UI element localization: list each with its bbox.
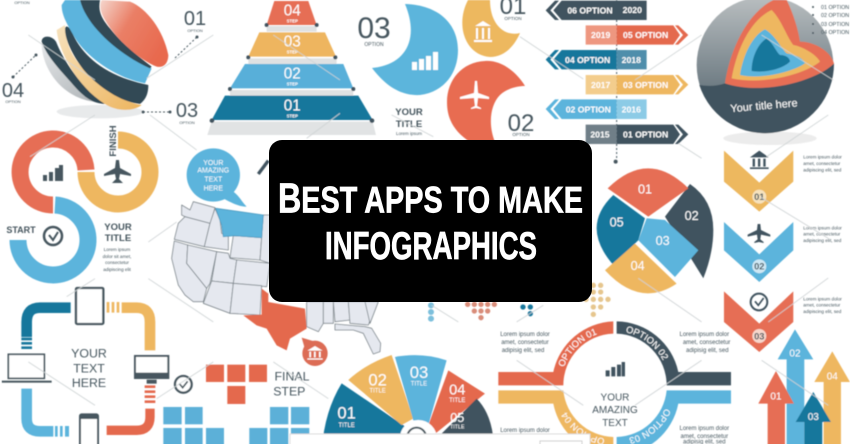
device cycle: HERE	[72, 376, 106, 390]
square blocks: FINAL	[274, 370, 310, 384]
speech balloon: HERE	[204, 185, 223, 192]
fan chart	[322, 355, 494, 444]
chevron 02: adipiscing elit, sed	[803, 238, 842, 243]
coral top	[100, 0, 168, 67]
option labels around hemisphere: OPTION	[187, 28, 203, 33]
option ring diagram: YOUR	[601, 392, 629, 403]
option ring diagram: adipisig elit, sed	[502, 348, 544, 354]
bottom popup strip	[290, 434, 590, 444]
connector lines	[28, 35, 833, 405]
chevron 02	[724, 222, 842, 282]
fan chart: TITLE	[449, 398, 465, 404]
option ring diagram: amet, consectetur	[681, 434, 728, 440]
option labels around hemisphere: 03	[176, 100, 198, 122]
pie chart	[597, 168, 713, 293]
fan chart: 05	[450, 411, 464, 425]
timeline option arrows: 06 OPTION	[567, 6, 613, 16]
device cycle: YOUR	[71, 346, 107, 360]
moon: blue 03: YOUR	[395, 107, 423, 118]
row 03	[586, 75, 617, 94]
US map south east	[307, 302, 381, 354]
title panel	[269, 140, 592, 302]
moon: blue 03: TITLE	[396, 119, 422, 130]
chevron 01: Lorem ipsum dolor	[803, 155, 842, 160]
infinity loop: TITLE	[105, 233, 131, 244]
infinity loop: consectetur	[105, 260, 129, 265]
step pyramid: 02	[284, 66, 301, 83]
chevron 03: 03	[754, 331, 764, 341]
option ring diagram: Lorem ipsum dolor	[680, 426, 729, 432]
infinity loop	[6, 125, 150, 275]
step pyramid: 04	[284, 3, 301, 20]
chevron 01: adipiscing elit, sed	[803, 167, 842, 172]
timeline option arrows: 05 OPTION	[623, 30, 668, 40]
step pyramid: 03	[284, 34, 301, 51]
pie chart: 02	[685, 209, 699, 223]
fan chart: 01	[337, 404, 356, 423]
chevron 01: amet, consectetur	[803, 161, 841, 166]
moon: blue 03: 03	[357, 12, 391, 45]
sphere legend: 02 OPTION	[821, 13, 849, 19]
option labels around hemisphere: OPTION	[5, 99, 21, 104]
phone	[80, 414, 98, 444]
bowl	[42, 43, 107, 103]
timeline option arrows: 01 OPTION	[623, 129, 668, 139]
speech balloon: TEXT	[204, 177, 223, 184]
square blocks	[163, 365, 310, 444]
step pyramid: STEP	[287, 49, 298, 54]
fan chart: TITLE	[411, 381, 427, 387]
timeline option arrows: 2016	[622, 105, 641, 115]
pie chart: 05	[610, 216, 624, 230]
pie chart: 03	[656, 234, 670, 248]
tablet	[76, 288, 103, 324]
hemisphere stack	[42, 0, 168, 118]
growth arrows: 02	[789, 349, 801, 360]
upper dark band	[80, 0, 152, 68]
option labels around hemisphere	[2, 0, 206, 125]
timeline option arrows: 2017	[591, 80, 610, 90]
chevron 01	[724, 151, 842, 212]
timeline option arrows: 2015	[590, 129, 610, 139]
option labels around hemisphere: 01	[184, 8, 206, 30]
chevron 01: 01	[754, 192, 764, 202]
Texas	[243, 289, 307, 350]
blue band	[62, 0, 152, 83]
infinity loop: adipiscing elit	[103, 267, 132, 272]
speech balloon	[187, 148, 268, 207]
option ring diagram: Lorem ipsum dolor	[500, 332, 550, 338]
heart sphere: Your title here	[730, 97, 798, 115]
sphere legend: 04 OPTION	[821, 30, 849, 36]
square blocks: STEP	[273, 385, 305, 399]
option ring diagram: TEXT	[602, 418, 628, 429]
growth arrows	[758, 329, 850, 444]
timeline option arrows: 02 OPTION	[566, 105, 611, 115]
option ring diagram: Lorem ipsum dolor	[680, 332, 729, 338]
option labels around hemisphere: OPTION	[179, 120, 195, 125]
chevron 02: amet, consectetur	[803, 232, 841, 237]
heart sphere	[697, 0, 834, 145]
device cycle: TEXT	[73, 361, 105, 375]
Montana	[216, 208, 263, 238]
moon: blue 03	[357, 4, 458, 136]
title line 1: BEST APPS TO MAKE	[278, 174, 583, 222]
timeline option arrows: 04 OPTION	[565, 55, 610, 65]
infinity loop: Lorem ipsum	[104, 247, 130, 252]
chevron 03: amet, consectetur	[803, 303, 841, 308]
step pyramid: STEP	[287, 18, 298, 23]
timeline option arrows: 2018	[622, 55, 641, 65]
step pyramid: 01	[284, 98, 301, 115]
lower dark band	[42, 37, 105, 104]
moon: coral 02: 02	[508, 110, 534, 137]
US map west	[172, 202, 270, 315]
row 01	[586, 125, 617, 144]
row 06	[553, 1, 647, 20]
pie chart: 01	[638, 182, 652, 196]
timeline option arrows: 2020	[623, 5, 642, 15]
speech balloon: AMAZING	[197, 168, 229, 175]
chevron 03: Lorem ipsum dolor	[803, 296, 842, 301]
moon: coral 02	[447, 61, 534, 142]
fan chart: TITLE	[450, 425, 465, 431]
option ring diagram: Lorem ipsum dolor	[500, 428, 550, 434]
title line 2: INFOGRAPHICS	[325, 225, 537, 268]
fan chart: 04	[449, 383, 465, 399]
timeline option arrows	[546, 0, 688, 164]
middle dark band	[65, 27, 148, 104]
clock	[175, 376, 192, 393]
chevron 03: adipiscing elit, sed	[803, 309, 842, 314]
yellow band	[57, 25, 142, 110]
infinity loop: START	[6, 225, 36, 235]
map pin	[302, 338, 328, 366]
fan chart: TITLE	[338, 423, 355, 429]
step pyramid: STEP	[287, 113, 298, 118]
sphere legend: 03 OPTION	[821, 22, 849, 28]
timeline option arrows: 2019	[591, 30, 610, 40]
laptop	[8, 354, 44, 378]
step pyramid	[207, 1, 376, 135]
dot arrows	[428, 283, 611, 322]
sphere legend: 01 OPTION	[821, 5, 849, 11]
moon: yellow 01	[462, 0, 526, 57]
option ring diagram: amet, consectetur	[501, 340, 549, 346]
sphere legend	[812, 5, 849, 36]
chevron 03	[724, 291, 842, 352]
chevron 02: Lorem ipsum dolor	[803, 225, 842, 230]
row 05	[586, 25, 617, 45]
speech balloon: YOUR	[203, 160, 223, 167]
pie chart: 04	[631, 259, 645, 273]
infinity loop: FINISH	[108, 125, 119, 157]
fan chart: TITLE	[369, 389, 386, 395]
option labels around hemisphere: OPTION	[14, 0, 30, 5]
chevron 02: 02	[754, 262, 764, 272]
option ring diagram: AMAZING	[592, 405, 638, 416]
fan chart: 03	[410, 363, 428, 382]
option ring diagram	[498, 320, 732, 444]
device cycle	[2, 288, 192, 444]
fan chart: 02	[368, 370, 387, 389]
option ring diagram: OPTION 01	[558, 328, 598, 367]
option ring diagram: OPTION 02	[626, 326, 669, 361]
growth arrows: 03	[808, 412, 819, 423]
infinity loop: dolor sit amet,	[103, 254, 131, 259]
growth arrows: 04	[827, 371, 838, 382]
option labels around hemisphere: 04	[2, 80, 24, 102]
moon: blue 03: OPTION	[364, 42, 384, 48]
timeline option arrows: 03 OPTION	[623, 80, 668, 90]
option ring diagram: amet, consectetur	[683, 340, 730, 346]
monitor	[135, 356, 168, 378]
growth arrows: 01	[770, 391, 782, 402]
row 04	[553, 50, 617, 69]
moon: blue 03: Lorem ipsum	[396, 131, 422, 136]
infinity loop: YOUR	[104, 222, 132, 233]
moon: coral 02: OPTION	[512, 132, 530, 137]
moon: yellow 01: OPTION	[504, 16, 522, 21]
option ring diagram: adipisig elit, sed	[686, 348, 729, 354]
step pyramid: STEP	[287, 81, 298, 86]
row 02	[553, 99, 617, 119]
